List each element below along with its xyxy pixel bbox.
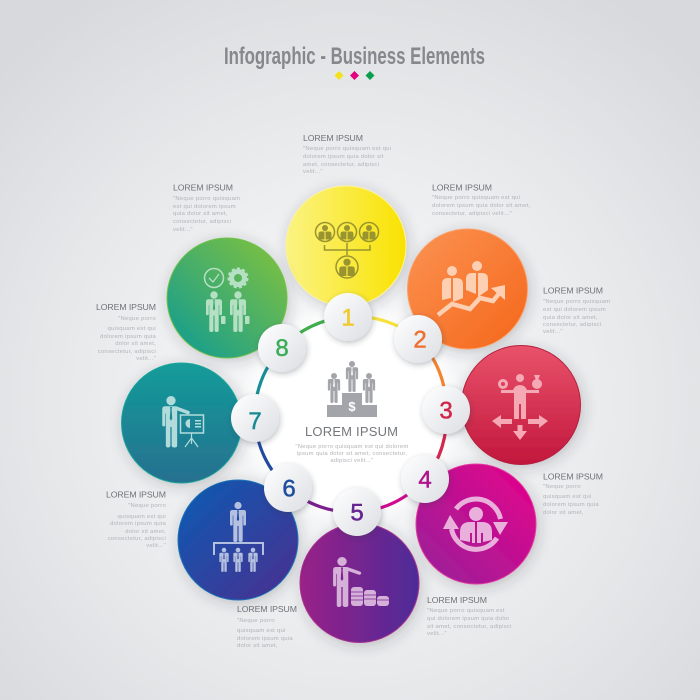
title decoration diamonds bbox=[334, 71, 374, 80]
text block: upper left: LOREM IPSUM bbox=[173, 182, 233, 192]
text block: lower left bbox=[106, 490, 166, 549]
icon: decision arrows bbox=[492, 374, 548, 440]
text block: lower right bbox=[543, 472, 603, 516]
text block: bottom right: qui dolorem ipsum quia dolor bbox=[427, 616, 510, 622]
text block: upper left: consectetur, adipisci bbox=[173, 219, 231, 225]
text block: right bbox=[543, 286, 610, 335]
text block: top: dolorem ipsum quia dolor sit bbox=[303, 154, 384, 160]
text block: bottom right: "Neque porro quisquam est bbox=[427, 608, 505, 614]
number badge 4: 4 bbox=[418, 466, 432, 494]
text block: bottom right: sit amet, consectetur, adipisci bbox=[427, 624, 512, 630]
text block: bottom: dolor sit amet, bbox=[237, 643, 278, 649]
text block: lower left: "Neque porro bbox=[128, 503, 166, 509]
title: Infographic - Business Elements bbox=[224, 43, 485, 70]
icon: team growth arrow bbox=[438, 261, 505, 315]
panel: circle 3 red bbox=[462, 346, 580, 464]
text block: right: LOREM IPSUM bbox=[543, 286, 603, 296]
panel: circle 6 blue bbox=[178, 480, 298, 600]
text block: upper left bbox=[173, 182, 240, 233]
text block: lower right: quisquam est qui bbox=[543, 494, 592, 500]
center text: "Neque porro quisquam est qui dolorem bbox=[295, 444, 409, 450]
text block: lower right: dolor sit amet, bbox=[543, 510, 584, 516]
center text: adipisci velit..." bbox=[330, 458, 374, 464]
number badge 5: 5 bbox=[350, 500, 364, 526]
text block: bottom: "Neque porro bbox=[237, 618, 275, 624]
number badge 6: 6 bbox=[282, 476, 296, 502]
text block: right: est qui dolorem ipsum bbox=[543, 307, 606, 313]
panel: circle 7 teal bbox=[122, 363, 242, 483]
number badge 6 bbox=[264, 464, 312, 512]
text block: top: velit..." bbox=[303, 169, 323, 175]
number badge 3: 3 bbox=[439, 398, 453, 424]
text block: left: velit..." bbox=[136, 356, 156, 362]
text block: lower left: consectetur, adipisci bbox=[108, 536, 166, 542]
text block: bottom: LOREM IPSUM bbox=[237, 604, 297, 614]
text block: bottom right: LOREM IPSUM bbox=[427, 595, 487, 605]
text block: upper right bbox=[432, 182, 531, 217]
number badge 8: 8 bbox=[275, 335, 289, 362]
center glow panel bbox=[236, 299, 466, 529]
text block: bottom: quisquam est qui bbox=[237, 628, 286, 634]
text block: right: "Neque porro quisquam bbox=[543, 299, 610, 305]
icon: man with coin stacks bbox=[333, 557, 389, 607]
text block: top: LOREM IPSUM bbox=[303, 133, 363, 143]
text block: top: amet, consectetur, adipisci bbox=[303, 162, 379, 168]
icon: two men with clock and gear bbox=[204, 268, 250, 332]
number badge 2 bbox=[394, 315, 442, 363]
text block: left: LOREM IPSUM bbox=[96, 302, 156, 312]
text block: top bbox=[303, 133, 391, 175]
text block: left: dolor sit amet, bbox=[115, 341, 156, 347]
text block: bottom right bbox=[427, 595, 512, 637]
text block: left: consectetur, adipisci bbox=[98, 349, 156, 355]
text block: right: velit..." bbox=[543, 329, 563, 335]
center text: ipsum quia dolor sit amet, consectetur, bbox=[297, 451, 407, 457]
text block: right: quia dolor sit amet, bbox=[543, 315, 598, 321]
center text bbox=[295, 424, 409, 464]
text block: bottom right: velit..." bbox=[427, 631, 447, 637]
icon: team hierarchy bbox=[316, 222, 378, 278]
text block: lower left: dolorem ipsum quia bbox=[110, 521, 166, 527]
number badge 8 bbox=[258, 324, 306, 372]
number badge 1: 1 bbox=[341, 304, 355, 332]
text block: left: quisquam est qui bbox=[107, 326, 156, 332]
panel: circle 4 magenta bbox=[416, 464, 536, 584]
text block: upper left: quia dolor sit amet, bbox=[173, 211, 228, 217]
text block: upper left: est qui dolorem ipsum bbox=[173, 204, 236, 210]
panel: circle 2 orange bbox=[408, 229, 528, 349]
text block: left bbox=[96, 302, 156, 362]
text block: lower left: velit..." bbox=[146, 543, 166, 549]
number badge 5 bbox=[333, 488, 381, 536]
panel: circle 8 green bbox=[167, 238, 287, 358]
icon: podium with three men: $ bbox=[348, 399, 356, 414]
number badge 1 bbox=[324, 293, 372, 341]
text block: lower left: quisquam est qui bbox=[117, 514, 166, 520]
icon: presenter with board bbox=[162, 396, 204, 448]
number badge 2: 2 bbox=[413, 326, 427, 354]
icon: person with cycle arrows bbox=[443, 499, 508, 549]
text block: bottom: dolorem ipsum quia bbox=[237, 636, 293, 642]
icon: podium with three men bbox=[327, 361, 377, 417]
text block: lower right: dolorem ipsum quia bbox=[543, 502, 599, 508]
text block: left: dolorem ipsum quia bbox=[100, 334, 156, 340]
panel: circle 1 yellow bbox=[286, 186, 406, 306]
connecting ring bbox=[255, 317, 446, 512]
number badge 7 bbox=[231, 394, 279, 442]
text block: lower right: "Neque porro bbox=[543, 484, 581, 490]
text block: upper right: consectetur, adipisci velit..." bbox=[432, 211, 512, 217]
text block: lower right: LOREM IPSUM bbox=[543, 472, 603, 482]
text block: lower left: LOREM IPSUM bbox=[106, 490, 166, 500]
text block: upper left: velit..." bbox=[173, 227, 193, 233]
number badge 4 bbox=[401, 455, 449, 503]
number badge 7: 7 bbox=[248, 408, 262, 435]
text block: upper right: LOREM IPSUM bbox=[432, 182, 492, 192]
text block: upper left: "Neque porro quisquam bbox=[173, 196, 240, 202]
text block: bottom bbox=[237, 604, 297, 649]
text block: upper right: dolorem ipsum quia dolor sit amet, bbox=[432, 203, 531, 209]
text block: top: "Neque porro quisquam est qui bbox=[303, 146, 391, 152]
icon: manager and team bbox=[214, 502, 263, 572]
text block: right: consectetur, adipisci bbox=[543, 322, 601, 328]
text block: left: "Neque porro bbox=[118, 316, 156, 322]
number badge 3 bbox=[422, 386, 470, 434]
text block: upper right: "Neque porro quisquam est qui bbox=[432, 195, 520, 201]
center text: LOREM IPSUM bbox=[305, 424, 398, 439]
panel: circle 5 purple bbox=[300, 524, 419, 642]
text block: lower left: dolor sit amet, bbox=[125, 529, 166, 535]
